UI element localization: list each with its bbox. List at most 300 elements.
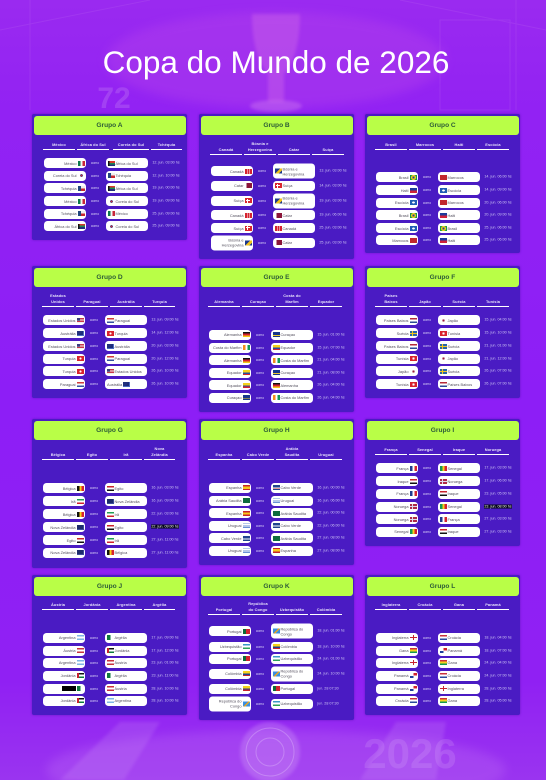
panel: Grupo I <box>365 419 520 546</box>
match: Suécia x Tunísia: 15. jun. 10:00 hs <box>484 331 512 335</box>
match: Estados Unidos x Paraguai: 13. jun. 09:00 hs <box>151 318 179 322</box>
panel: Grupo G: Zelândia <box>151 452 168 456</box>
match: Portugal x Uzbequistão: como <box>256 657 264 661</box>
match: Turquia x Paraguai: Turquia <box>62 356 76 361</box>
match: Suíça x Bósnia e Herzegovina: Bósnia e <box>282 196 298 201</box>
match: Equador x Alemanha <box>209 380 345 390</box>
match: Austrália x Turquia: 14. jun. 12:00 hs <box>151 331 179 335</box>
match: República do Congo x Uzbequistão: como <box>256 702 264 706</box>
match: Haiti x Escócia: como <box>423 188 431 192</box>
column headers: Grupo F teams <box>375 292 509 307</box>
match: Costa do Marfim x Equador: como <box>256 346 264 350</box>
panel: Grupo I: França <box>384 446 398 452</box>
match: Egito x Irã: Egito <box>67 538 76 542</box>
match: Colômbia x República do Congo: República do <box>280 669 303 674</box>
match: Egito x Irã: Irã <box>114 538 119 542</box>
match: Tunísia x Japão: 21. jun. 12:00 hs <box>484 356 512 360</box>
match: Tunísia x Japão: Japão <box>448 356 458 361</box>
match: Países Baixos x Suécia: como <box>423 344 431 348</box>
panel: Grupo D: Austrália <box>117 298 135 304</box>
match: Argentina x Argélia <box>43 633 185 643</box>
match: Coreia do Sul x Tchéquia: Coreia do Sul <box>53 173 76 178</box>
column headers: Grupo J teams <box>42 608 178 610</box>
heading: Grupo B <box>200 116 352 135</box>
panel: Grupo E: Curaçao <box>250 298 266 304</box>
match: Suíça x Canadá <box>211 223 347 233</box>
match: Alemanha x Costa do Marfim: 21. jun. 04:00 hs <box>317 358 345 362</box>
match: Turquia x Paraguai <box>43 354 179 364</box>
panel: Grupo D: Paraguai <box>83 298 101 304</box>
match: Croácia x Gana: 28. jun. 05:00 hs <box>484 698 512 702</box>
match: Escócia x Brasil: Escócia <box>395 226 408 230</box>
match: Colômbia x Portugal <box>209 684 351 694</box>
match: Brasil x Haiti: como <box>423 213 431 217</box>
match: Turquia x Estados Unidos: Turquia <box>62 369 76 374</box>
match: Inglaterra x Croácia: 18. jun. 04:00 hs <box>484 635 512 639</box>
panel: Grupo D <box>32 266 187 398</box>
match: Espanha x Cabo Verde <box>209 483 351 493</box>
column headers: Grupo B teams <box>210 140 344 155</box>
match: Gana x Panamá <box>376 646 518 656</box>
match: Egito x Irã: 27. jun. 11:00 hs <box>152 538 178 542</box>
match: Áustria x Jordânia: 17. jun. 12:00 hs <box>151 648 179 652</box>
match: Paraguai x Austrália <box>43 379 179 389</box>
match: Austrália x Turquia: Austrália <box>60 331 76 336</box>
match: Coreia do Sul x Tchéquia: como <box>91 174 99 178</box>
match: Argentina x Argélia: Argentina <box>59 635 76 640</box>
panel: Grupo H: Uruguai <box>318 452 334 456</box>
panel: Grupo A: Coreia do Sul <box>118 142 144 146</box>
match: Japão x Suécia <box>376 366 518 376</box>
panel: Grupo J: Argentina <box>116 602 136 606</box>
match: Suíça x Canadá: 25. jun. 03:00 hs <box>319 226 347 230</box>
match: Austrália x Turquia <box>43 328 179 338</box>
match: França x Iraque <box>376 489 518 499</box>
panel: Grupo I: Noruega <box>485 446 501 452</box>
match: Alemanha x Curaçao <box>209 330 345 340</box>
match: Áustria x Jordânia <box>43 646 185 656</box>
match: Países Baixos x Suécia <box>376 341 512 351</box>
panel: Grupo C: Haiti <box>455 142 463 146</box>
match: Áustria x Jordânia: como <box>90 649 98 653</box>
match: África do Sul x Coreia do Sul <box>44 221 180 231</box>
match: Gana x Panamá: como <box>423 649 431 653</box>
match: Bélgica x Egito: 16. jun. 03:00 hs <box>151 486 179 490</box>
match: Espanha x Cabo Verde: Espanha <box>226 485 242 490</box>
match: Tchéquia x África do Sul: África do Sul <box>116 186 138 191</box>
panel: Grupo I: Senegal <box>417 446 433 452</box>
match: Turquia x Estados Unidos: como <box>90 369 98 373</box>
match: Canadá x Catar: Canadá <box>230 213 244 218</box>
match: Cabo Verde x Arábia Saudita: Cabo Verde <box>221 536 242 541</box>
panel: Grupo I: Iraque <box>453 446 465 452</box>
match: Colômbia x República do Congo: 24. jun. 10:00 hs <box>317 671 345 675</box>
match: Nova Zelândia x Egito: 22. jun. 09:00 hs <box>151 525 179 529</box>
match: Panamá x Croácia: Panamá <box>394 673 408 678</box>
match: Tchéquia x África do Sul: como <box>91 186 99 190</box>
match: Colômbia x República do Congo: Congo <box>280 674 292 679</box>
match: Costa do Marfim x Equador: Costa do Marfim <box>213 345 242 350</box>
match: Brasil x Marrocos <box>376 172 512 182</box>
match: Escócia x Brasil <box>376 223 512 233</box>
panel: Grupo F: Japão <box>419 298 431 304</box>
heading: Grupo H: Grupo H <box>263 427 290 434</box>
match: Suécia x Tunísia <box>376 328 512 338</box>
match: Curaçao x Costa do Marfim: 26. jun. 04:00 hs <box>317 395 345 399</box>
match: Estados Unidos x Paraguai <box>43 315 179 325</box>
match: Senegal x Iraque: Iraque <box>448 529 459 534</box>
match: Croácia x Gana <box>376 696 518 706</box>
match: Portugal x Uzbequistão: 24. jun. 01:00 hs <box>317 656 345 660</box>
match: Panamá x Croácia: Croácia <box>448 673 461 678</box>
match: Catar x Suíça: Catar <box>234 183 244 188</box>
match: Equador x Curaçao: como <box>256 371 264 375</box>
heading: Grupo F: Grupo F <box>430 274 455 281</box>
match: México x Coreia do Sul <box>44 196 180 206</box>
match: Equador x Curaçao: 21. jun. 08:00 hs <box>317 370 345 374</box>
match: França x Iraque: 23. jun. 05:00 hs <box>484 491 512 495</box>
match: Espanha x Arábia Saudita: como <box>256 511 264 515</box>
match: Arábia Saudita x Uruguai: 16. jun. 06:00 hs <box>317 498 345 502</box>
match: Países Baixos x Japão <box>376 315 512 325</box>
match: Costa do Marfim x Equador <box>209 343 345 353</box>
match: República do Congo x Uzbequistão: Uzbequistão <box>280 701 302 706</box>
match: Iraque x Noruega: como <box>423 479 431 483</box>
match: Irã x Nova Zelândia: Nova Zelândia <box>114 499 140 504</box>
match: Estados Unidos x Austrália: Estados Unidos <box>48 344 76 349</box>
match: Canadá x Catar: como <box>258 213 266 217</box>
match: Espanha x Arábia Saudita <box>209 508 351 518</box>
match: Argélia x Áustria: Áustria <box>114 686 127 691</box>
match: República do Congo x Uzbequistão <box>209 696 351 711</box>
match: Tunísia x Países Baixos: Países Baixos <box>448 382 472 386</box>
match: Áustria x Jordânia: Áustria <box>63 648 76 653</box>
match: Suíça x Canadá: Suíça <box>234 226 244 230</box>
panel: Grupo B <box>199 114 354 259</box>
match: Austrália x Turquia: Turquia <box>114 331 128 336</box>
match: Equador x Curaçao <box>209 368 345 378</box>
match: Cabo Verde x Arábia Saudita: como <box>256 536 264 540</box>
match: República do Congo x Uzbequistão: Congo <box>230 704 242 709</box>
match: Escócia x Brasil: Brasil <box>448 226 457 230</box>
match: Brasil x Haiti <box>376 210 512 220</box>
match: Curaçao x Costa do Marfim: como <box>256 396 264 400</box>
match: Cabo Verde x Arábia Saudita: 27. jun. 08:00 hs <box>317 536 345 540</box>
heading: Grupo I: Grupo I <box>431 427 454 434</box>
background: stadium, trophy and 2026 decoration: 72 <box>97 82 131 115</box>
match: França x Iraque: Iraque <box>448 491 459 496</box>
match: Panamá x Inglaterra <box>376 684 518 694</box>
match: Tchéquia x África do Sul <box>44 183 180 193</box>
match: Senegal x Iraque: 27. jun. 03:00 hs <box>484 529 512 533</box>
panel: Grupo D: Unidos <box>51 298 65 304</box>
match: Suécia x Tunísia: como <box>423 331 431 335</box>
panel: Grupo B: Catar <box>289 146 299 152</box>
match: Uzbequistão x Colômbia: como <box>256 645 264 649</box>
match: Uruguai x Cabo Verde: Cabo Verde <box>280 523 301 528</box>
heading: Grupo G: Grupo G <box>96 427 123 434</box>
match: Brasil x Marrocos: como <box>423 175 431 179</box>
column headers: Grupo G teams <box>42 458 178 460</box>
match: Países Baixos x Japão: Japão <box>448 318 458 323</box>
match: Uzbequistão x Colômbia: Uzbequistão <box>220 644 242 649</box>
panel: Grupo H <box>199 419 354 565</box>
match: Bósnia e Herzegovina x Catar: como <box>258 241 266 245</box>
match: Jordânia x Argélia <box>43 671 185 681</box>
match: Jordânia x Argélia: 23. jun. 11:00 hs <box>152 673 178 677</box>
match: México x Coreia do Sul: Coreia do Sul <box>116 198 139 204</box>
match: Panamá x Inglaterra: Inglaterra <box>448 686 464 691</box>
match: África do Sul x Coreia do Sul: Coreia do Sul <box>116 224 139 228</box>
match: Escócia x Brasil: 25. jun. 06:00 hs <box>484 226 512 230</box>
column headers: Grupo D teams <box>42 292 175 307</box>
heading: Grupo A <box>34 116 186 135</box>
match: Panamá x Inglaterra: 28. jun. 05:00 hs <box>484 686 512 690</box>
match: África do Sul x Coreia do Sul: como <box>91 224 99 228</box>
panel: Grupo F: Suécia <box>452 298 466 304</box>
match: Argélia x Áustria <box>43 684 185 694</box>
match: Tchéquia x México: Tchéquia <box>61 211 76 216</box>
match: Uzbequistão x Colômbia: Colômbia <box>280 644 297 649</box>
match: Alemanha x Costa do Marfim: Alemanha <box>224 358 242 363</box>
match: Equador x Curaçao: Equador <box>227 370 242 375</box>
panel: Grupo D: Turquia <box>152 298 167 304</box>
match: Arábia Saudita x Uruguai: Arábia Saudita <box>216 498 242 503</box>
panel: Grupo J: Áustria <box>51 602 65 606</box>
match: Croácia x Gana: Gana <box>448 698 457 703</box>
match: Iraque x Noruega <box>376 476 518 486</box>
match: Turquia x Estados Unidos: Estados Unidos <box>114 369 142 374</box>
heading: Grupo G <box>34 421 186 440</box>
match: Croácia x Gana: como <box>423 699 431 703</box>
panel: Grupo A: Tchéquia <box>158 142 175 146</box>
match: Brasil x Haiti: Haiti <box>448 213 455 218</box>
match: Uruguai x Cabo Verde: 22. jun. 06:00 hs <box>317 523 345 527</box>
match: Uruguai x Espanha <box>209 546 351 556</box>
match: Estados Unidos x Austrália: 20. jun. 03:00 hs <box>151 344 179 348</box>
match: Brasil x Haiti: Brasil <box>399 213 408 218</box>
heading: Grupo F <box>366 268 518 287</box>
panel: Grupo E: Equador <box>318 298 334 304</box>
panel: Grupo E <box>199 266 354 412</box>
heading: Grupo J: Grupo J <box>97 583 122 590</box>
panel: Grupo A <box>32 114 187 240</box>
match: França x Senegal: França <box>396 466 408 471</box>
match: Tunísia x Países Baixos: como <box>423 382 431 386</box>
match: Uruguai x Cabo Verde: Uruguai <box>228 523 242 528</box>
column headers: Grupo K teams <box>208 614 344 616</box>
panel: Grupo J: Argélia <box>153 602 166 606</box>
match: Senegal x Iraque: Senegal <box>394 529 408 534</box>
match: Equador x Curaçao: Curaçao <box>280 370 295 375</box>
match: Colômbia x República do Congo: Colômbia <box>225 671 242 676</box>
match: Países Baixos x Japão: 15. jun. 04:00 hs <box>484 318 512 322</box>
match: Portugal x Uzbequistão <box>209 654 351 664</box>
match: Argélia x Áustria: 28. jun. 10:00 hs <box>151 686 179 690</box>
match: Canadá x Bósnia e Herzegovina: 13. jun. 03:00 hs <box>319 168 347 172</box>
match: Tunísia x Países Baixos <box>376 379 518 389</box>
match: Tunísia x Países Baixos: 26. jun. 07:00 hs <box>484 382 512 386</box>
match: Gana x Panamá: Gana <box>399 648 408 653</box>
match: Áustria x Jordânia: Jordânia <box>114 648 129 653</box>
match: Portugal x República do Congo: Portugal <box>227 629 242 634</box>
match: Tunísia x Japão <box>376 354 512 364</box>
match: Uzbequistão x Colômbia: 18. jun. 10:00 hs <box>317 644 345 648</box>
panel: Grupo K: do Congo <box>249 606 267 612</box>
panel: Grupo E: Costa do <box>283 292 301 298</box>
heading: Grupo B: Grupo B <box>263 122 290 129</box>
background: stadium, trophy and 2026 decoration: 2026 <box>363 730 457 777</box>
match: Países Baixos x Suécia: 21. jun. 01:00 hs <box>484 344 512 348</box>
match: Suíça x Bósnia e Herzegovina: como <box>258 199 266 203</box>
match: Panamá x Croácia <box>376 671 518 681</box>
heading: Grupo J <box>34 577 186 596</box>
heading: Grupo C: Grupo C <box>429 122 456 129</box>
match: Coreia do Sul x Tchéquia: 12. jun. 10:00 hs <box>152 173 180 177</box>
match: Alemanha x Costa do Marfim: Costa do Marfim <box>280 358 309 363</box>
panel: Grupo H: Espanha <box>216 452 232 456</box>
match: Costa do Marfim x Equador: 15. jun. 07:00 hs <box>317 345 345 349</box>
match: Estados Unidos x Austrália <box>43 341 179 351</box>
match: Noruega x França: 27. jun. 03:00 hs <box>484 517 512 521</box>
panel: Grupo L: Inglaterra <box>382 602 400 606</box>
match: Bósnia e Herzegovina x Catar: 25. jun. 03:00 hs <box>319 240 347 244</box>
match: México x África do Sul: como <box>91 161 99 165</box>
match: Nova Zelândia x Bélgica <box>43 548 185 558</box>
match: Inglaterra x Croácia: Croácia <box>448 635 461 640</box>
match: Senegal x Iraque: como <box>423 530 431 534</box>
match: Marrocos x Haiti <box>376 235 512 245</box>
match: Espanha x Cabo Verde: Cabo Verde <box>280 485 301 490</box>
match: Austrália x Turquia: como <box>90 331 98 335</box>
match: Uruguai x Espanha: como <box>256 549 264 553</box>
panel: Grupo F: Tunísia <box>486 298 500 304</box>
match: Alemanha x Curaçao: Alemanha <box>224 332 242 337</box>
panel: Grupo B: Canadá <box>219 146 233 152</box>
match: Jordânia x Argentina: Jordânia <box>61 698 76 703</box>
match: Cabo Verde x Arábia Saudita <box>209 533 351 543</box>
match: Jordânia x Argentina <box>43 696 185 706</box>
heading: Grupo K <box>200 577 352 596</box>
match: Colômbia x Portugal: jun. 28 07:30 <box>317 686 339 690</box>
match: Noruega x França: Noruega <box>394 517 408 522</box>
match: Irã x Nova Zelândia <box>43 496 185 506</box>
match: Nova Zelândia x Bélgica: como <box>90 551 98 555</box>
match: Croácia x Gana: Croácia <box>395 698 408 703</box>
match: Argentina x Áustria: como <box>90 661 98 665</box>
match: Coreia do Sul x Tchéquia: Tchéquia <box>116 173 131 178</box>
heading: Grupo K: Grupo K <box>263 583 290 590</box>
match: Turquia x Paraguai: como <box>90 357 98 361</box>
match: Iraque x Noruega: 17. jun. 06:00 hs <box>484 479 512 483</box>
match: Arábia Saudita x Uruguai: como <box>256 499 264 503</box>
match: Canadá x Bósnia e Herzegovina: como <box>258 169 266 173</box>
match: Brasil x Marrocos: 14. jun. 06:00 hs <box>484 175 512 179</box>
match: Iraque x Noruega: Noruega <box>448 479 462 484</box>
match: Noruega x Senegal: Senegal <box>448 504 462 509</box>
heading: Grupo D <box>34 268 186 287</box>
match: Suíça x Bósnia e Herzegovina: 19. jun. 03:00 hs <box>319 198 347 202</box>
match: Noruega x Senegal: 23. jun. 08:00 hs <box>484 504 512 508</box>
match: Canadá x Bósnia e Herzegovina <box>211 164 347 178</box>
match: Marrocos x Haiti: Marrocos <box>392 238 408 243</box>
match: Coreia do Sul x Tchéquia <box>44 171 180 181</box>
match: Noruega x Senegal <box>376 502 518 512</box>
match: Bósnia e Herzegovina x Catar: Herzegovina <box>222 243 244 248</box>
match: Bélgica x Egito: Bélgica <box>63 486 76 491</box>
match: Colômbia x República do Congo <box>209 666 351 681</box>
column headers: Grupo A teams <box>43 142 182 150</box>
match: França x Senegal: Senegal <box>448 466 462 471</box>
panel: Grupo L: Panamá <box>485 602 501 606</box>
panel: Grupo G <box>32 419 187 568</box>
match: Noruega x Senegal: como <box>423 505 431 509</box>
match: Jordânia x Argélia: Argélia <box>114 673 127 678</box>
match: Canadá x Bósnia e Herzegovina: Canadá <box>230 168 244 174</box>
panel: Grupo C: Marrocos <box>416 142 434 146</box>
match: Turquia x Estados Unidos: 26. jun. 10:00 hs <box>151 369 179 373</box>
match: Nova Zelândia x Egito: Nova Zelândia <box>50 525 76 530</box>
match: México x África do Sul: 12. jun. 03:00 hs <box>152 161 180 165</box>
heading: Grupo H <box>200 421 352 440</box>
panel: Grupo K: República <box>248 600 268 606</box>
match: Colômbia x República do Congo: como <box>256 672 264 676</box>
match: Bélgica x Irã: como <box>90 512 98 516</box>
match: Egito x Irã: como <box>90 538 98 542</box>
match: Bélgica x Irã: 22. jun. 03:00 hs <box>151 512 179 516</box>
match: Noruega x França: como <box>423 517 431 521</box>
match: Suíça x Bósnia e Herzegovina: Suíça <box>234 198 244 203</box>
match: Suíça x Bósnia e Herzegovina <box>211 194 347 208</box>
match: Paraguai x Austrália: Austrália <box>107 382 122 386</box>
match: Portugal x República do Congo: como <box>256 629 264 633</box>
panel: Grupo J: Jordânia <box>83 602 101 606</box>
match: Suécia x Tunísia: Suécia <box>397 331 408 336</box>
match: Inglaterra x Croácia <box>376 633 518 643</box>
match: Nova Zelândia x Bélgica: 27. jun. 11:00 hs <box>152 550 178 554</box>
heading: Grupo E: Grupo E <box>263 274 290 281</box>
match: Estados Unidos x Austrália: Austrália <box>114 344 130 349</box>
match: Jordânia x Argentina: como <box>90 699 98 703</box>
match: Tchéquia x México: como <box>91 212 99 216</box>
match: África do Sul x Coreia do Sul: África do Sul <box>54 224 76 228</box>
match: Portugal x República do Congo: República do <box>280 626 303 631</box>
match: Espanha x Cabo Verde: como <box>256 486 264 490</box>
match: Argentina x Áustria: 23. jun. 01:00 hs <box>151 660 179 664</box>
match: Irã x Nova Zelândia: 16. jun. 09:00 hs <box>151 499 179 503</box>
match: Inglaterra x Gana <box>376 658 518 668</box>
match: Inglaterra x Gana: 24. jun. 04:00 hs <box>484 660 512 664</box>
match: Paraguai x Austrália: como <box>90 382 98 386</box>
match: Equador x Alemanha: Alemanha <box>280 383 298 388</box>
heading: Grupo L <box>366 577 518 596</box>
panel: Grupo E: Marfim <box>285 298 299 304</box>
match: México x África do Sul <box>44 158 180 168</box>
match: Bélgica x Egito: como <box>90 486 98 490</box>
match: Portugal x República do Congo: Congo <box>280 631 292 636</box>
match: Panamá x Croácia: como <box>423 674 431 678</box>
match: Jordânia x Argentina: Argentina <box>114 698 131 703</box>
match: Tunísia x Japão: Tunísia <box>396 356 408 361</box>
match: Arábia Saudita x Uruguai <box>209 496 351 506</box>
match: Paraguai x Austrália: Paraguai <box>60 382 76 386</box>
panel: Grupo A: África do Sul <box>80 142 106 146</box>
match: Argélia x Áustria: Argélia <box>63 686 75 691</box>
panel: Grupo F: Baixos <box>384 298 398 304</box>
match: Inglaterra x Croácia: Inglaterra <box>392 635 408 640</box>
match: Colômbia x Portugal: como <box>256 687 264 691</box>
match: Haiti x Escócia: 14. jun. 09:00 hs <box>484 188 512 192</box>
